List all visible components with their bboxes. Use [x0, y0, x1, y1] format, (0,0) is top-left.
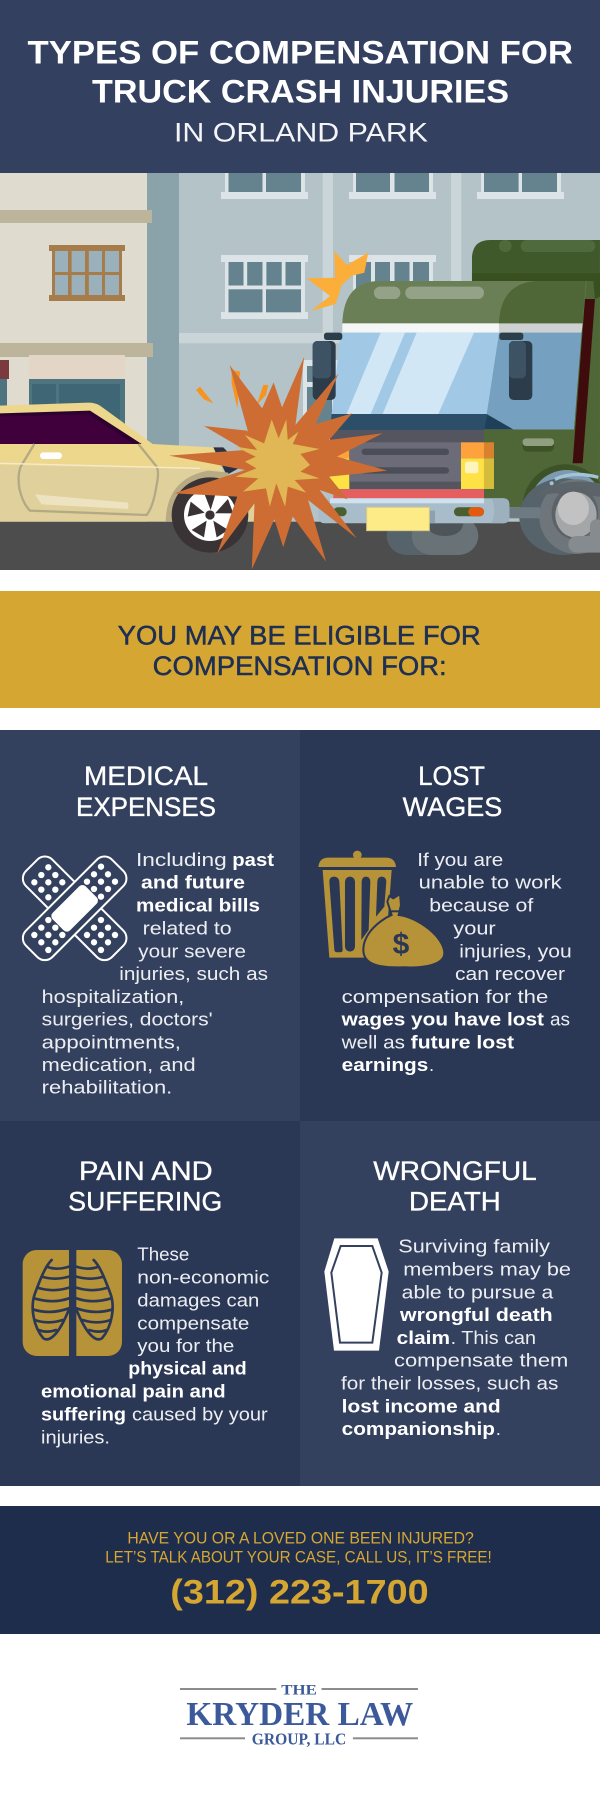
text: lost wages — [341, 849, 572, 1075]
heading: lost wages: LOST — [418, 761, 485, 791]
text: medical expenses: your severe — [138, 940, 246, 961]
text: lost wages: because of — [429, 895, 534, 916]
text: medical expenses: past — [232, 849, 274, 870]
text: pain and suffering: caused by your — [132, 1403, 268, 1424]
banner heading: COMPENSATION FOR: — [153, 651, 447, 681]
text: wrongful death — [341, 1236, 571, 1439]
heading: wrongful death — [373, 1156, 537, 1217]
text: lost wages: earnings — [342, 1054, 428, 1075]
background buildings — [0, 173, 600, 570]
axle — [509, 507, 540, 518]
call to action text: LET’S TALK ABOUT YOUR CASE, CALL US, IT’S FREE! — [105, 1548, 492, 1566]
panel: lost wages — [300, 730, 600, 1121]
heading: pain and suffering — [68, 1156, 222, 1217]
text: pain and suffering: injuries. — [41, 1426, 110, 1447]
call to action text: HAVE YOU OR A LOVED ONE BEEN INJURED? — [127, 1529, 474, 1547]
heading: lost wages — [403, 761, 502, 822]
left building window — [49, 245, 125, 301]
title — [28, 34, 573, 109]
text: medical expenses: Including — [136, 849, 227, 870]
text: pain and suffering: These — [137, 1244, 189, 1265]
text: wrongful death: . This can — [451, 1327, 536, 1348]
text: lost wages: wages you have lost — [341, 1009, 544, 1030]
title: TRUCK CRASH INJURIES — [92, 73, 509, 109]
phone number: (312) 223-1700 — [170, 1573, 429, 1611]
icon: trash can and money bag: $ — [393, 928, 410, 961]
bumper — [318, 489, 509, 531]
logo: The Kryder Law Group: GROUP, LLC — [252, 1729, 346, 1748]
text: pain and suffering: physical and — [128, 1358, 247, 1379]
text: pain and suffering: you for the — [137, 1335, 234, 1356]
call to action text — [105, 1529, 492, 1566]
text: wrongful death: wrongful death — [399, 1304, 553, 1325]
door handle — [523, 441, 554, 452]
text: medical expenses: surgeries, doctors' — [42, 1009, 213, 1030]
upper windows — [221, 173, 564, 199]
logo: The Kryder Law Group: THE — [281, 1683, 317, 1699]
text: lost wages: your — [453, 918, 496, 939]
title: TYPES OF COMPENSATION FOR — [28, 34, 573, 70]
wheels — [387, 517, 478, 555]
middle windows — [221, 255, 436, 440]
text: wrongful death: able to pursue a — [402, 1281, 554, 1302]
heading: wrongful death: WRONGFUL — [373, 1156, 537, 1186]
text: pain and suffering: damages can — [137, 1290, 259, 1311]
text: medical expenses: appointments, — [42, 1031, 181, 1052]
banner heading — [118, 620, 481, 681]
rear wheel — [519, 464, 600, 555]
icon: rib cage — [23, 1250, 122, 1356]
text: lost wages: . — [429, 1054, 434, 1075]
cab roof — [342, 281, 587, 324]
heading: pain and suffering: PAIN AND — [79, 1156, 213, 1186]
text: pain and suffering: compensate — [137, 1312, 249, 1333]
explosion — [169, 357, 387, 569]
text: wrongful death: claim — [397, 1327, 450, 1348]
maroon pillar — [573, 299, 595, 463]
eligibility banner — [0, 591, 600, 708]
text: lost wages: future lost — [411, 1031, 514, 1052]
heading: wrongful death: DEATH — [409, 1187, 501, 1217]
icon: coffin — [324, 1238, 389, 1351]
text: medical expenses: injuries, such as — [119, 963, 268, 984]
heading: medical expenses: EXPENSES — [76, 792, 216, 822]
icon: bandages — [18, 852, 131, 965]
text: lost wages: well as — [341, 1031, 405, 1052]
panel: medical expenses — [0, 730, 300, 1121]
icon: trash can and money bag — [318, 851, 444, 967]
heading: medical expenses: MEDICAL — [84, 761, 208, 791]
text: pain and suffering — [41, 1244, 269, 1447]
text: medical expenses: medical bills — [136, 895, 260, 916]
windshield — [332, 333, 499, 414]
text: wrongful death: compensate them — [394, 1350, 568, 1371]
text: pain and suffering: emotional pain and — [41, 1381, 226, 1402]
text: lost wages: can recover — [455, 963, 565, 984]
header banner — [0, 0, 600, 173]
text: medical expenses: hospitalization, — [42, 986, 184, 1007]
text: medical expenses: related to — [143, 918, 232, 939]
flames behind explosion — [196, 370, 268, 408]
logo: The Kryder Law Group — [180, 1683, 418, 1748]
text: medical expenses: and future — [141, 872, 245, 893]
heading: lost wages: WAGES — [403, 792, 502, 822]
side body — [484, 429, 600, 507]
text: lost wages: as — [550, 1009, 570, 1030]
logo: The Kryder Law Group: KRYDER LAW — [186, 1696, 413, 1733]
text: wrongful death: . — [496, 1418, 501, 1439]
heading: medical expenses — [76, 761, 216, 822]
heading: pain and suffering: SUFFERING — [68, 1187, 222, 1217]
text: pain and suffering: non-economic — [137, 1267, 269, 1288]
text: wrongful death: lost income and — [342, 1395, 501, 1416]
wheel rim — [184, 489, 236, 541]
text: pain and suffering: suffering — [41, 1403, 126, 1424]
text: wrongful death: companionship — [342, 1418, 495, 1439]
illustration: truck crash scene — [0, 173, 600, 570]
text: wrongful death: members may be — [403, 1259, 571, 1280]
headlights — [330, 442, 494, 489]
spark — [307, 251, 368, 311]
text: medical expenses: medication, and — [42, 1054, 196, 1075]
text: medical expenses — [42, 849, 274, 1098]
panel: wrongful death — [300, 1121, 600, 1486]
text: lost wages: compensation for the — [342, 986, 548, 1007]
truck — [313, 240, 600, 555]
grille — [330, 430, 484, 489]
text: wrongful death: for their losses, such as — [341, 1372, 558, 1393]
call to action band — [0, 1506, 600, 1634]
mirrors — [313, 333, 532, 400]
cargo box — [472, 240, 600, 287]
text: lost wages: injuries, you — [459, 940, 572, 961]
car — [0, 403, 260, 553]
shop front — [0, 355, 125, 439]
banner heading: YOU MAY BE ELIGIBLE FOR — [118, 620, 481, 650]
side window — [487, 333, 582, 429]
text: lost wages: If you are — [417, 849, 503, 870]
road — [0, 522, 600, 570]
text: wrongful death: Surviving family — [398, 1236, 551, 1257]
subtitle: IN ORLAND PARK — [174, 118, 428, 148]
text: medical expenses: rehabilitation. — [42, 1077, 172, 1098]
text: lost wages: unable to work — [419, 872, 563, 893]
panel: pain and suffering — [0, 1121, 300, 1486]
